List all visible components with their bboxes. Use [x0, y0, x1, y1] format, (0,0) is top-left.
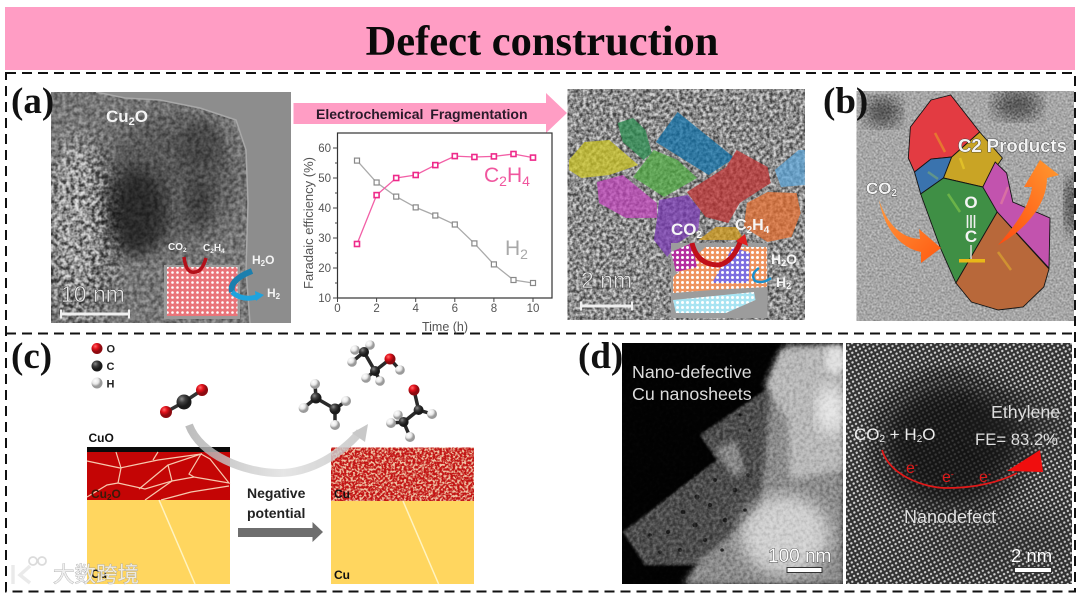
- labels: CO2, C2H4, H2O, H2: 2: [747, 225, 753, 236]
- label: CO2 + H2O: 2: [917, 434, 923, 445]
- molecule: ethylene: [299, 379, 351, 430]
- chart axes and ticks: 30: [318, 233, 331, 245]
- label: Cu2O: O: [135, 107, 148, 126]
- inset: Cu2O lattice with reaction arrows: H: [267, 286, 276, 300]
- label: Nano-defective Cu nanosheets: Cu nanosheets: [632, 384, 752, 404]
- left electrode: CuO / Cu2O / Cu: CuO: [88, 431, 114, 445]
- series: C2H4: [354, 152, 536, 246]
- right electrode: porous Cu: [331, 448, 474, 584]
- legend: atoms: H: [106, 378, 114, 390]
- grain boundaries: [87, 452, 229, 500]
- inset: Cu2O lattice with reaction arrows: CO: [168, 242, 183, 253]
- label: Nano-defective Cu nanosheets: Nano-defective: [632, 362, 752, 382]
- inset: Cu2O lattice with reaction arrows: 4: [221, 248, 225, 255]
- TEM image: Cu2O particle: [51, 92, 291, 323]
- series: H2: [354, 158, 536, 286]
- label: CO2 + H2O: CO: [854, 425, 880, 444]
- HRTEM image: lattice with nanodefect: [846, 343, 1072, 584]
- scale bar: 10 nm: 10 nm: [61, 281, 125, 307]
- inset: Cu2O lattice with reaction arrows: 2: [210, 248, 214, 255]
- scale bar: 2 nm: 2 nm: [1011, 545, 1052, 566]
- arrow: Electrochemical Fragmentation: Electrochemical Fragmentation: [316, 106, 528, 122]
- label: Negative potential: potential: [247, 505, 305, 521]
- chart axes and ticks: 50: [318, 173, 331, 185]
- chart axes and ticks: 4: [412, 303, 419, 315]
- electron transfer arrow: -: [915, 460, 918, 470]
- left electrode: CuO / Cu2O / Cu: [87, 431, 230, 584]
- inset: Cu2O lattice with reaction arrows: O: [265, 253, 274, 267]
- labels: CO2, C2H4, H2O, H2: H: [771, 251, 781, 267]
- electron transfer arrow: [882, 450, 1043, 488]
- label: CO2 + H2O: O: [922, 425, 936, 444]
- label: Nanodefect: Nanodefect: [904, 507, 996, 527]
- arrow: CO2 to products: [189, 424, 368, 473]
- right electrode: porous Cu: Cu: [334, 487, 350, 501]
- nanopores: [648, 414, 752, 554]
- inset: Cu2O lattice with reaction arrows: 2: [261, 259, 266, 268]
- arrow: negative potential: [238, 522, 323, 542]
- molecule: acetaldehyde: [386, 384, 437, 442]
- label: Cu2O: 2: [129, 116, 135, 128]
- labels: CO2, C2H4, H2O, H2: CO: [671, 220, 696, 239]
- series: C2H4: H: [507, 164, 522, 187]
- series: H2: H: [505, 237, 520, 260]
- electron transfer arrow: e: [906, 460, 915, 477]
- label: Negative potential: Negative: [247, 485, 306, 501]
- electron transfer arrow: e: [979, 469, 988, 486]
- STEM image: nanosheets: [622, 343, 845, 584]
- chart axes and ticks: 60: [318, 143, 331, 155]
- panel label d: (d): [578, 336, 623, 377]
- scale bar: 10 nm: [60, 281, 130, 318]
- label: CO2 + H2O: + H: [885, 425, 917, 444]
- TEM image with grain map: [856, 90, 1080, 321]
- inset: Cu2O lattice with reaction arrows: H: [214, 243, 221, 254]
- labels: CO2, C2H4, H2O, H2: 2: [786, 281, 791, 291]
- adsorbed CO on surface: [959, 193, 985, 262]
- labels: CO2, C2H4, H2O, H2: C: [735, 217, 747, 234]
- panel label c: (c): [11, 336, 52, 377]
- chart axes and ticks: [301, 143, 539, 334]
- panel: a: [11, 81, 805, 334]
- labels: CO2, C2H4, H2O, H2: 2: [781, 258, 786, 268]
- label: Cu2O: Cu: [106, 107, 129, 126]
- labels: CO2, C2H4, H2O, H2: H: [776, 274, 786, 290]
- chart axes and ticks: 10: [527, 303, 539, 315]
- chart axes and ticks: Faradaic efficiency (%): [301, 157, 316, 289]
- molecule: CO2: [160, 384, 208, 418]
- scale bar: 2 nm: 2 nm: [581, 267, 632, 293]
- watermark: 大数跨境: [53, 563, 139, 587]
- inset: Cu2O lattice with reaction arrows: H: [252, 253, 261, 267]
- small lattice marks: [928, 133, 1011, 270]
- panel: b: [823, 81, 1080, 321]
- labels: CO2, C2H4, H2O, H2: 4: [764, 225, 770, 236]
- scale bar: 100 nm: 100 nm: [768, 546, 831, 567]
- inset: Cu2O lattice with reaction arrows: 2: [183, 247, 187, 254]
- left electrode: CuO / Cu2O / Cu: 2: [107, 493, 112, 502]
- chart axes and ticks: 10: [318, 293, 331, 305]
- labels: CO2, C2H4, H2O, H2: H: [752, 217, 764, 234]
- panel label a: (a): [11, 81, 54, 122]
- watermark: [13, 557, 139, 587]
- line chart: Faradaic efficiency vs time: [301, 133, 552, 334]
- chart axes and ticks: 8: [491, 303, 497, 315]
- chart axes and ticks: 40: [318, 203, 331, 215]
- arrow: C2 products out: [998, 160, 1059, 245]
- chart axes and ticks: 2: [373, 303, 380, 315]
- series: C2H4: 2: [499, 173, 507, 189]
- label: Ethylene FE: FE= 83.2%: [975, 430, 1058, 449]
- label: C2 Products: C2 Products: [958, 135, 1067, 156]
- labels: CO2, C2H4, H2O, H2: [671, 217, 797, 291]
- title banner: Defect construction: [366, 18, 718, 65]
- grains: [908, 95, 1050, 310]
- adsorbed CO on surface: C: [965, 227, 977, 246]
- label: CO2: CO: [866, 179, 892, 198]
- panel: c: [11, 336, 474, 587]
- chart axes and ticks: 20: [318, 263, 331, 275]
- scale bar: 2 nm: [580, 267, 633, 310]
- legend: atoms: C: [106, 361, 114, 373]
- arrow: CO2 in: [879, 200, 941, 263]
- chart axes and ticks: Time (h): [422, 320, 468, 334]
- legend: atoms: O: [106, 344, 116, 356]
- chart axes and ticks: 6: [452, 303, 458, 315]
- series: C2H4: C: [484, 164, 499, 187]
- inset: Cu2O lattice with reaction arrows: C: [203, 243, 210, 254]
- labels: CO2, C2H4, H2O, H2: 2: [696, 230, 702, 241]
- panel: d: [578, 336, 1072, 584]
- electron transfer arrow: -: [951, 469, 954, 479]
- label: CO2 + H2O: 2: [880, 434, 886, 445]
- left electrode: CuO / Cu2O / Cu: Cu: [91, 487, 107, 501]
- label: Ethylene FE: Ethylene: [991, 402, 1060, 422]
- inset: Cu2O lattice with reaction arrows: 2: [276, 292, 281, 301]
- left electrode: CuO / Cu2O / Cu: O: [111, 487, 121, 501]
- labels: CO2, C2H4, H2O, H2: O: [786, 251, 797, 267]
- adsorbed CO on surface: O: [964, 193, 978, 212]
- series: C2H4: 4: [522, 173, 530, 189]
- TEM image: fragmented particles: [568, 89, 805, 320]
- label: Negative potential: [247, 485, 306, 521]
- chart axes and ticks: 0: [334, 303, 341, 315]
- label: Nano-defective Cu nanosheets: [632, 362, 752, 404]
- inset: fragmented lattice: [671, 234, 771, 318]
- electron transfer arrow: e: [942, 469, 951, 486]
- right electrode: porous Cu: Cu: [334, 568, 350, 582]
- left electrode: CuO / Cu2O / Cu: Cu: [91, 567, 107, 581]
- panel label b: (b): [823, 81, 868, 122]
- label: CO2: 2: [892, 188, 898, 199]
- legend: atoms: [92, 343, 116, 390]
- arrow: Electrochemical Fragmentation: [294, 93, 567, 133]
- series: H2: 2: [520, 246, 528, 262]
- label: Ethylene FE: [975, 402, 1060, 449]
- inset: Cu2O lattice with reaction arrows: [164, 242, 281, 319]
- molecule: ethanol: [347, 340, 405, 386]
- electron transfer arrow: -: [988, 469, 991, 479]
- title banner: [5, 7, 1075, 70]
- coloured fragments: [569, 112, 805, 257]
